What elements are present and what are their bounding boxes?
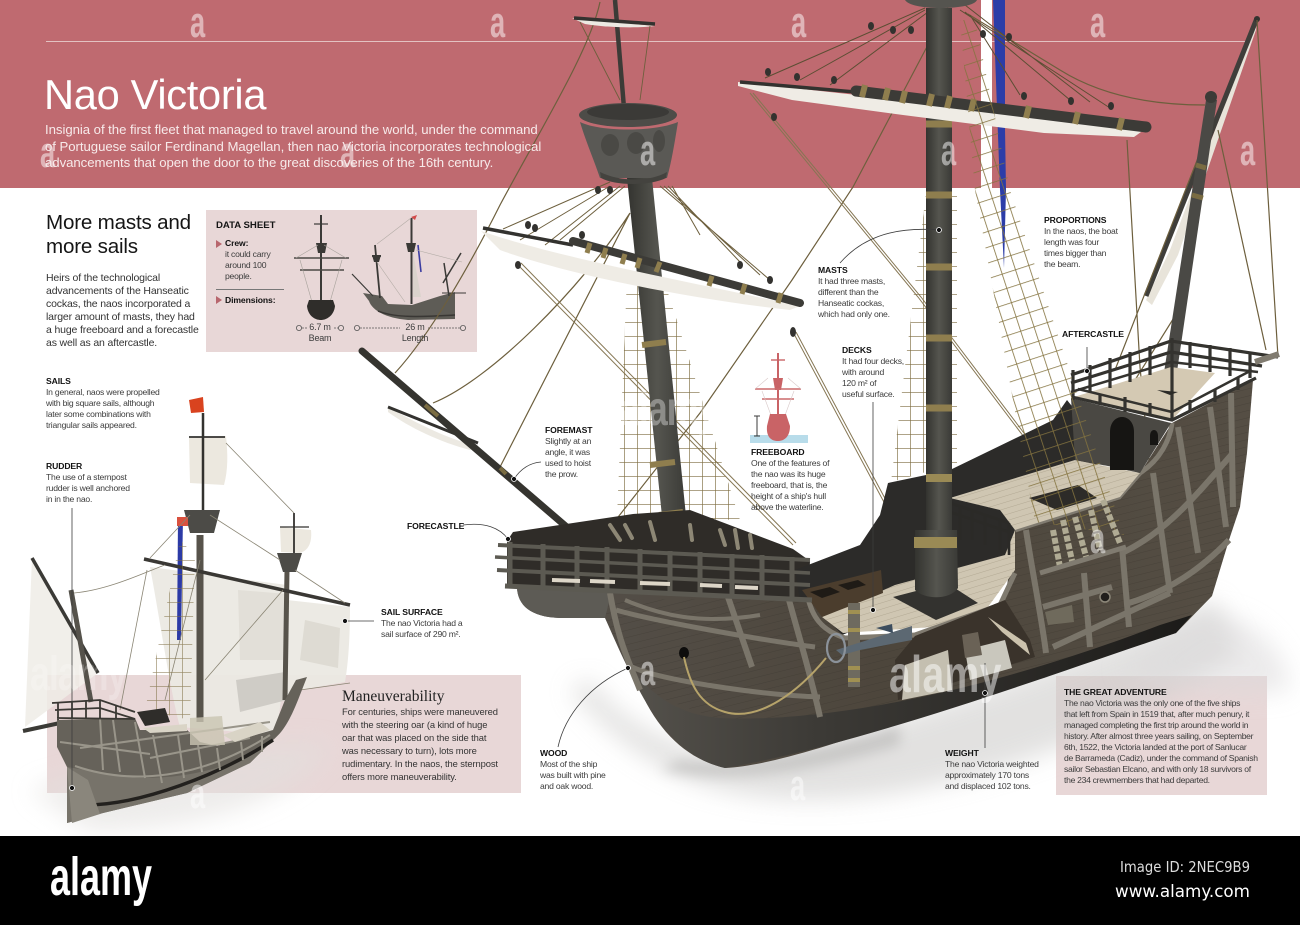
far inner wall: [795, 400, 1100, 640]
watermarks: a: [40, 127, 56, 177]
mizzen lateen spar with sail: [1146, 16, 1260, 305]
watermarks: a: [1240, 125, 1256, 175]
label: freeboard: FREEBOARD: [751, 447, 805, 457]
label: weight: [945, 748, 1039, 791]
label: decks: [842, 345, 904, 399]
long ropes behind masts: [395, 2, 1278, 540]
watermarks: a: [640, 645, 656, 695]
yards: [144, 559, 350, 605]
label: decks: It had four decks,: [842, 356, 904, 366]
label: masts: MASTS: [818, 265, 848, 275]
panel text: maneuverability: with the steering oar (a kind of huge: [342, 719, 487, 730]
dimension markers: [296, 325, 466, 331]
panel text: the great adventure: 6th, 1522, the Victoria landed at the port of Sanlucar: [1064, 742, 1246, 752]
heading: more masts: more sails: [46, 234, 138, 258]
beam measurement: Beam: [309, 333, 331, 343]
panel: maneuverability background: [47, 675, 521, 793]
rigging: [74, 443, 350, 710]
header banner: [0, 0, 1300, 188]
freeboard diagram: [750, 353, 808, 443]
label: wood: Most of the ship: [540, 759, 597, 769]
label: rudder: [46, 461, 130, 504]
label: foremast: angle, it was: [545, 447, 590, 457]
blue and white pennant: [981, 0, 1006, 268]
icon: crew marker: [216, 240, 222, 248]
label: proportions: PROPORTIONS: [1044, 215, 1106, 225]
data sheet: crew: Crew:: [225, 238, 248, 248]
panel text: the great adventure: sailor Sebastian Elcano, and with only 18 survivors of: [1064, 764, 1251, 774]
panel text: the great adventure: that left from Spain in 1519 that, after much penury, it: [1064, 709, 1249, 719]
fore yard with furled sail: [481, 228, 800, 310]
label: rudder: rudder is well anchored: [46, 483, 130, 493]
fore top sail: [280, 527, 311, 553]
main sail: [150, 567, 287, 735]
lower hull band: [67, 740, 273, 823]
data sheet: crew: people.: [225, 271, 252, 281]
main mast upper: [926, 8, 952, 470]
pennant: [177, 517, 183, 640]
bowsprit and spritsail: [362, 351, 583, 541]
intro column text: a huge freeboard and a forecastle: [46, 324, 199, 336]
callout: foremast: [514, 462, 541, 479]
mizzen base: [1157, 390, 1178, 395]
callout: aftercastle: [1086, 347, 1088, 371]
label: decks: DECKS: [842, 345, 872, 355]
heading: more masts: More masts and: [46, 211, 191, 234]
watermarks: alamy: [889, 644, 1002, 703]
data sheet: crew: [225, 238, 271, 281]
masts: [202, 413, 204, 510]
watermarks: alamy: [30, 647, 128, 700]
footer image id: Image ID: 2NEC9B9: [1120, 858, 1250, 876]
fore top: [277, 553, 302, 572]
watermarks: a: [340, 127, 356, 177]
label: sails: In general, naos were propelled: [46, 387, 160, 397]
watermarks: a: [790, 760, 806, 810]
label: freeboard: the nao was its huge: [751, 469, 825, 479]
label: weight: The nao Victoria weighted: [945, 759, 1039, 769]
front view ship: [294, 215, 349, 320]
forecastle rail grid: [495, 542, 812, 600]
crow's nest: [579, 103, 678, 184]
callout: wood: [558, 668, 628, 747]
mizzen mast: [1161, 100, 1217, 392]
label: sail surface: sail surface of 290 m².: [381, 629, 460, 639]
foremast: [627, 178, 687, 526]
aftercastle door: [1110, 417, 1134, 470]
channel shelf: [1040, 547, 1126, 573]
label: proportions: length was four: [1044, 237, 1099, 247]
label: decks: with around: [842, 367, 884, 377]
callout dots: [70, 228, 1090, 790]
label: foremast: the prow.: [545, 469, 578, 479]
panel text: maneuverability: For centuries, ships were maneuvered: [342, 706, 498, 717]
label: rudder: RUDDER: [46, 461, 82, 471]
main mast rope bands: [926, 124, 952, 408]
label: forecastle: FORECASTLE: [407, 521, 464, 531]
length measurement: Length: [402, 333, 428, 343]
label: freeboard: height of a ship's hull: [751, 491, 826, 501]
panel text: the great adventure: managed completing the first trip around the world in: [1064, 720, 1248, 730]
title: Nao Victoria: [44, 71, 266, 118]
watermarks: a: [941, 125, 957, 175]
blocks: [515, 22, 1114, 337]
label: sails: [46, 376, 160, 430]
footer logo: alamy: [50, 847, 152, 907]
aftercastle top deck: [1074, 367, 1215, 420]
watermarks: alamy: [620, 382, 718, 435]
main yard with furled sail: [738, 82, 1148, 137]
ship's boat: [802, 570, 883, 617]
label: freeboard: [751, 447, 830, 512]
big ship: full cutaway nao: [362, 0, 1279, 768]
top sail main: [189, 436, 227, 485]
label: proportions: In the naos, the boat: [1044, 226, 1118, 236]
label: weight: approximately 170 tons: [945, 770, 1029, 780]
intro column text: cockas, the naos incorporated a: [46, 298, 190, 310]
deadeye chains: [1053, 500, 1120, 567]
label: freeboard: above the waterline.: [751, 502, 824, 512]
anchor rope and hawsehole: [679, 647, 826, 714]
forecastle interior: [507, 510, 810, 600]
main top: [184, 510, 220, 533]
icon: dimensions marker: [216, 296, 222, 304]
label: sails: triangular sails appeared.: [46, 420, 137, 430]
stern rail: [52, 700, 135, 720]
label: masts: Hanseatic cockas,: [818, 298, 884, 308]
fore deck deadeyes: [610, 522, 752, 548]
label: decks: useful surface.: [842, 389, 895, 399]
label: proportions: [1044, 215, 1118, 269]
gun and port: [1045, 592, 1110, 625]
data sheet: dimensions: Dimensions:: [225, 295, 275, 305]
quarter deck: [950, 460, 1140, 530]
hull frames: [60, 718, 270, 783]
label: sail surface: [381, 607, 463, 639]
footer bar: [0, 836, 1300, 925]
intro column text: Heirs of the technological: [46, 272, 160, 284]
intro text: [45, 122, 541, 170]
fore shroud nets: [617, 277, 740, 520]
callout: sail surface: [345, 620, 374, 622]
callout: masts: [840, 229, 939, 263]
watermarks: a: [190, 768, 206, 818]
panel: data sheet background: [206, 210, 477, 352]
main top bottom: [905, 0, 977, 8]
label: sail surface: The nao Victoria had a: [381, 618, 462, 628]
beam measurement: 6.7 m: [309, 322, 331, 332]
main right shroud net over the wall: [960, 20, 1124, 535]
label: sails: SAILS: [46, 376, 71, 386]
length measurement: 26 m: [405, 322, 425, 332]
rudder: [67, 767, 100, 823]
main yard lifts: [765, 5, 1110, 108]
aft rails: [1071, 338, 1279, 420]
side view ship: [352, 215, 466, 320]
label: wood: was built with pine: [540, 770, 606, 780]
label: masts: [818, 265, 890, 319]
stem post and anchor: [827, 603, 912, 687]
panel heading: maneuverability: Maneuverability: [342, 688, 444, 705]
intro column text: larger amount of masts, they had: [46, 311, 195, 323]
ground shadows: [30, 600, 1290, 832]
label: proportions: the beam.: [1044, 259, 1080, 269]
lower deck: [822, 530, 1015, 633]
hull rim cut: [1015, 423, 1172, 530]
intro column text: [46, 272, 199, 349]
main left shroud net: [891, 190, 957, 482]
label: wood: [540, 748, 606, 791]
callout: weight: [984, 663, 986, 748]
label: sails: with big square sails, although: [46, 398, 154, 408]
panel text: maneuverability: [342, 706, 498, 782]
intro column text: as well as an aftercastle.: [46, 337, 157, 349]
top yard with furled sail: [572, 18, 655, 100]
foremast rope bands: [642, 342, 683, 515]
fore yard lifts: [503, 182, 770, 280]
hull: [57, 677, 307, 823]
banner rule: [46, 41, 1250, 42]
panel text: the great adventure: de Barrameda (Cadiz), under the command of Spanish: [1064, 753, 1258, 763]
watermarks: a: [640, 125, 656, 175]
label: wood: WOOD: [540, 748, 567, 758]
plank lines: [605, 380, 1253, 720]
label: proportions: times bigger than: [1044, 248, 1106, 258]
label: sails: later some combinations with: [46, 409, 151, 419]
label: decks: 120 m² of: [842, 378, 876, 388]
data sheet: crew: it could carry: [225, 249, 271, 259]
label: masts: different than the: [818, 287, 878, 297]
callout: rudder: [71, 508, 73, 788]
label: freeboard: freeboard, that is, the: [751, 480, 827, 490]
intro text: of Portuguese sailor Ferdinand Magellan, then nao Victoria incorporates technological: [45, 138, 541, 154]
label: foremast: FOREMAST: [545, 425, 592, 435]
hull rim around lower deck: [808, 573, 1015, 638]
mini ships in data sheet: [294, 215, 466, 331]
label: foremast: [545, 425, 592, 479]
label: masts: which had only one.: [818, 309, 890, 319]
heading: more masts: [46, 211, 191, 258]
label: rudder: in in the nao.: [46, 494, 92, 504]
aftercastle window: [1150, 430, 1158, 445]
rope ladder: [145, 540, 195, 720]
hold interior: [895, 600, 1035, 700]
panel text: the great adventure: [1064, 687, 1258, 785]
small ship: full nao with sails: [23, 397, 350, 823]
callout lines: [72, 229, 1087, 788]
mid rail: [950, 503, 1009, 555]
keel: [617, 615, 1192, 768]
intro text: Insignia of the first fleet that managed to travel around the world, under the command: [45, 122, 538, 137]
flag: [189, 397, 204, 413]
panel text: the great adventure: history. After almost three years sailing, on September: [1064, 731, 1253, 741]
label: sail surface: SAIL SURFACE: [381, 607, 443, 617]
length measurement: [402, 322, 428, 343]
label: aftercastle: AFTERCASTLE: [1062, 329, 1124, 339]
panel text: maneuverability: rudimentary. In the naos, the sternpost: [342, 758, 498, 769]
deck hatch: [1029, 485, 1097, 510]
hull ribs: [610, 393, 1233, 717]
fore sail: [287, 600, 350, 705]
panel text: the great adventure: THE GREAT ADVENTURE: [1064, 687, 1167, 697]
data sheet: crew: around 100: [225, 260, 266, 270]
callout: forecastle: [463, 524, 508, 539]
intro text: advancements that open the door to the great discoveries of the 16th century.: [45, 155, 493, 170]
lateen spar: [32, 558, 98, 673]
top fore mast: [615, 0, 625, 120]
deck details: [137, 708, 170, 726]
panel text: maneuverability: offers more maneuverability.: [342, 771, 457, 782]
data sheet divider: [216, 289, 284, 290]
lateen sail: [25, 558, 98, 727]
label: foremast: Slightly at an: [545, 436, 591, 446]
label: foremast: used to hoist: [545, 458, 591, 468]
hull planking: [517, 380, 1253, 768]
label: masts: It had three masts,: [818, 276, 885, 286]
panel: the great adventure background: [1056, 676, 1267, 795]
panel text: the great adventure: The nao Victoria was the only one of the five ships: [1064, 698, 1240, 708]
beam measurement: [309, 322, 331, 343]
data sheet heading: DATA SHEET: [216, 220, 276, 231]
watermarks: a: [1090, 513, 1106, 563]
footer url: www.alamy.com: [1115, 882, 1250, 902]
label: freeboard: One of the features of: [751, 458, 829, 468]
intro column text: advancements of the Hanseatic: [46, 285, 189, 297]
label: wood: and oak wood.: [540, 781, 593, 791]
bow underside: [517, 588, 612, 618]
label: weight: and displaced 102 tons.: [945, 781, 1031, 791]
panel text: maneuverability: was necessary to turn), lots more: [342, 745, 477, 756]
aftercastle facade: [1071, 398, 1171, 473]
label: weight: WEIGHT: [945, 748, 979, 758]
main mast lower with base: [893, 465, 978, 620]
panel text: the great adventure: the 234 crewmembers that had departed.: [1064, 775, 1210, 785]
panel text: maneuverability: oar that was placed on the side that: [342, 732, 486, 743]
label: rudder: The use of a sternpost: [46, 472, 127, 482]
forecastle rail gaps: [552, 580, 758, 588]
callout: decks: [872, 402, 874, 610]
